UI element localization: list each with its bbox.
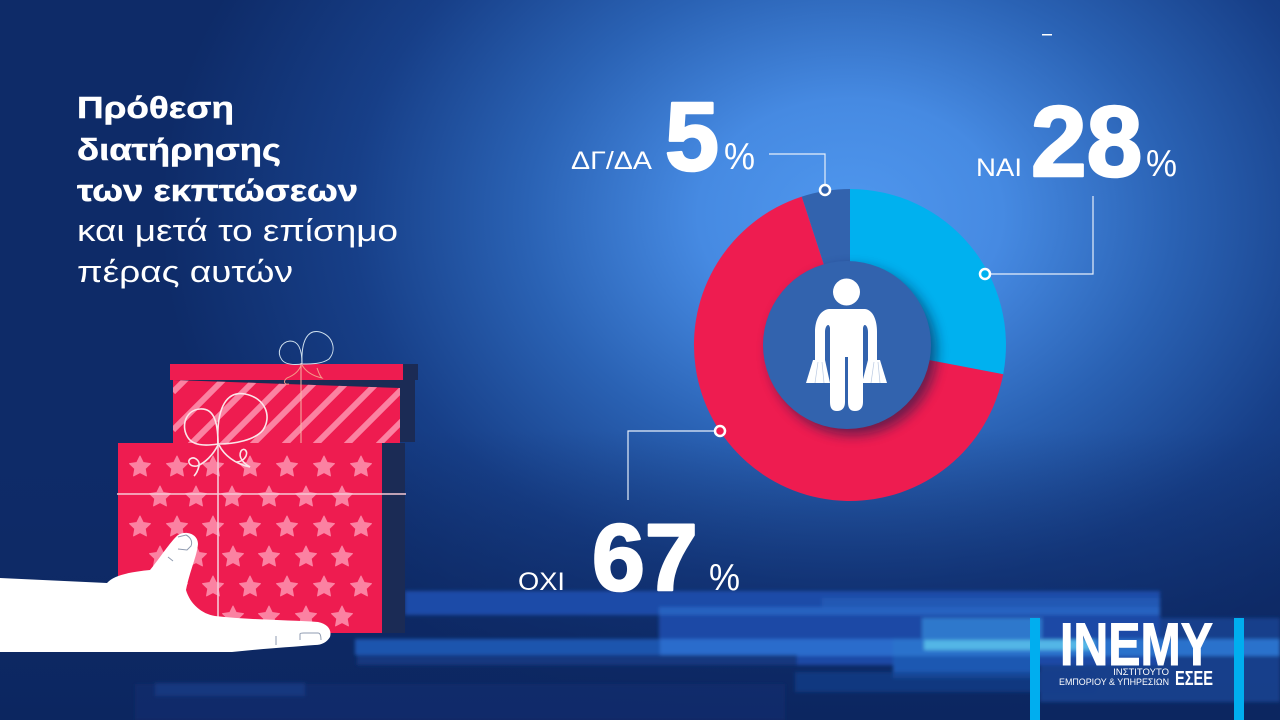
title: και μετά το επίσημο xyxy=(77,213,398,248)
callout: ΔΓ/ΔΑ 5%: 5 xyxy=(665,82,719,191)
callout: ΔΓ/ΔΑ 5% xyxy=(571,82,830,195)
title: Πρόθεση xyxy=(77,90,234,125)
background light bands xyxy=(135,591,1280,720)
top mark xyxy=(1042,34,1052,36)
callout: ΝΑΙ 28% xyxy=(976,86,1177,279)
callout: ΔΓ/ΔΑ 5%: % xyxy=(724,136,755,178)
callout: ΔΓ/ΔΑ 5%: ΔΓ/ΔΑ xyxy=(571,147,652,175)
logo: INEMY: ΕΜΠΟΡΙΟΥ & ΥΠΗΡΕΣΙΩΝ xyxy=(1059,677,1169,688)
segment: ΔΓ/ΔΑ 5% xyxy=(802,189,850,345)
logo: INEMY: ΕΣΕΕ xyxy=(1175,668,1213,690)
inner circle xyxy=(763,261,931,429)
callout: ΟΧΙ 67%: ΟΧΙ xyxy=(518,568,565,596)
upper gift box xyxy=(170,332,418,445)
illustration: gift boxes and hand xyxy=(0,332,418,652)
hand xyxy=(0,533,330,652)
lower gift box xyxy=(117,443,406,633)
callout: ΝΑΙ 28%: 28 xyxy=(1031,86,1142,198)
title: διατήρησης xyxy=(77,132,281,167)
title: πέρας αυτών xyxy=(77,254,293,289)
callout: ΟΧΙ 67% xyxy=(518,426,740,611)
callout: ΟΧΙ 67%: % xyxy=(709,557,740,599)
logo: INEMY: ΙΝΣΤΙΤΟΥΤΟ xyxy=(1113,667,1169,678)
logo: INEMY: INEMY xyxy=(1060,611,1213,678)
donut chart xyxy=(694,189,1006,501)
callout: ΝΑΙ 28%: ΝΑΙ xyxy=(976,154,1022,182)
segment: ΝΑΙ 28% xyxy=(850,189,1006,374)
icon: shopper with bags xyxy=(806,278,887,411)
ribbon bow xyxy=(185,394,267,476)
inner circle shadow xyxy=(769,267,937,435)
logo: INEMY xyxy=(1030,611,1244,720)
title: των εκπτώσεων xyxy=(77,173,358,208)
segment: ΟΧΙ 67% xyxy=(694,197,1003,501)
title xyxy=(77,90,398,289)
callout: ΟΧΙ 67%: 67 xyxy=(592,505,698,611)
callout: ΝΑΙ 28%: % xyxy=(1146,143,1177,185)
